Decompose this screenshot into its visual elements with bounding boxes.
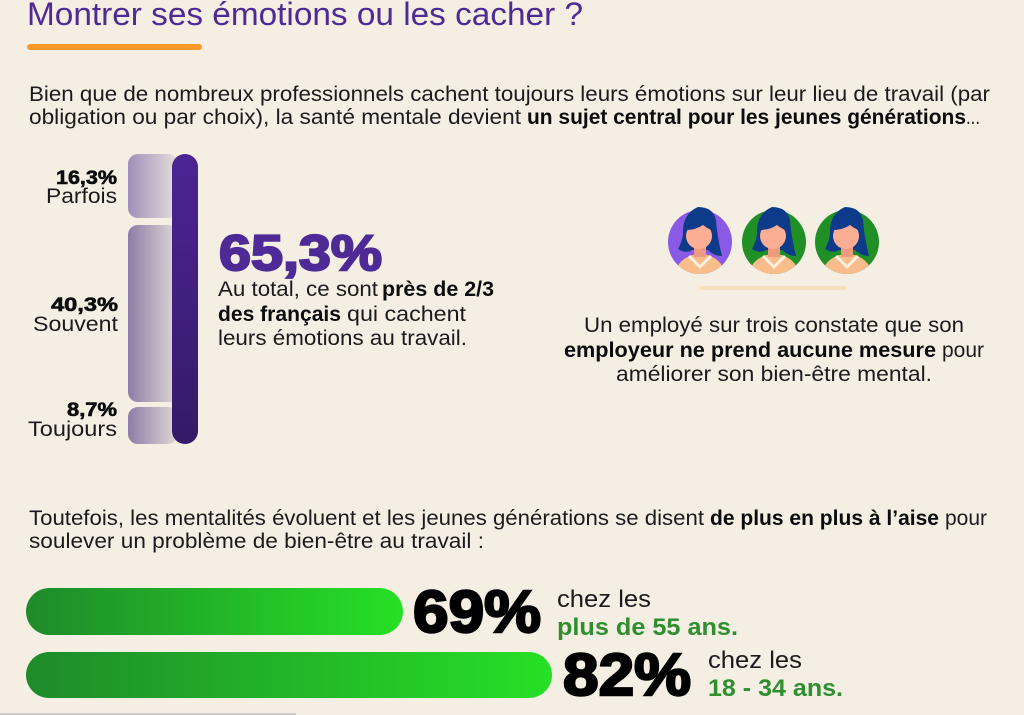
stat description: leurs émotions au travail. xyxy=(218,327,467,350)
label: plus de 55 ans xyxy=(557,586,738,641)
label: parfois xyxy=(46,168,117,208)
intro text: Bien que de nombreux professionnels cachent toujours leurs émotions sur leur lieu de travail (par xyxy=(29,83,990,106)
label: souvent: Souvent xyxy=(33,313,118,336)
employee callout text: pour xyxy=(942,339,984,362)
label: parfois: Parfois xyxy=(46,185,117,208)
icon: three employees xyxy=(668,207,879,274)
label: parfois: 16,3% xyxy=(56,168,117,189)
stat description xyxy=(218,278,494,350)
stat 69%: 69% xyxy=(413,579,541,645)
label: plus de 55 ans: plus de 55 ans. xyxy=(557,614,738,641)
icon: employee green 2 xyxy=(815,207,879,274)
second paragraph: pour xyxy=(945,507,987,530)
label: plus de 55 ans: chez les xyxy=(557,586,651,613)
label: 18-34 ans: chez les xyxy=(708,647,802,674)
title underline xyxy=(27,44,202,50)
intro text: ... xyxy=(966,106,980,129)
label: toujours: 8,7% xyxy=(67,400,117,421)
stat description: Au total, ce sont xyxy=(218,278,378,301)
bar: 18-34 ans xyxy=(26,652,552,698)
intro text: obligation ou par choix), la santé mentale devient xyxy=(29,106,521,129)
total bar xyxy=(172,154,198,444)
intro text: un sujet central pour les jeunes générations xyxy=(527,106,966,129)
label: toujours xyxy=(28,400,117,441)
employee callout text: Un employé sur trois constate que son xyxy=(584,314,964,337)
icon: employee purple xyxy=(668,207,732,274)
employee callout text: améliorer son bien-être mental. xyxy=(616,363,932,386)
label: toujours: Toujours xyxy=(28,418,117,441)
label: 18-34 ans xyxy=(708,647,843,702)
big stat 65,3%: 65,3% xyxy=(219,225,382,281)
second paragraph: soulever un problème de bien-être au travail : xyxy=(29,530,484,553)
stat 82%: 82% xyxy=(563,642,691,708)
stacked bar chart: hide emotions xyxy=(128,154,198,444)
label: souvent xyxy=(33,295,118,336)
bar: plus de 55 ans xyxy=(26,588,403,635)
second paragraph: de plus en plus à l’aise xyxy=(710,507,939,530)
second paragraph xyxy=(29,507,987,553)
label: 18-34 ans: 18 - 34 ans. xyxy=(708,675,843,702)
stat description: des français xyxy=(218,303,341,326)
segment: toujours xyxy=(128,407,178,444)
segment: parfois xyxy=(128,154,178,218)
employee callout text: employeur ne prend aucune mesure xyxy=(564,339,936,362)
label: souvent: 40,3% xyxy=(51,295,118,316)
stat description: qui cachent xyxy=(347,303,466,326)
icon: employee green 1 xyxy=(742,207,806,274)
intro text xyxy=(29,83,990,129)
employee callout text xyxy=(564,314,984,386)
second paragraph: Toutefois, les mentalités évoluent et les jeunes générations se disent xyxy=(29,507,704,530)
segment: souvent xyxy=(128,225,178,402)
stat description: près de 2/3 xyxy=(382,278,494,301)
